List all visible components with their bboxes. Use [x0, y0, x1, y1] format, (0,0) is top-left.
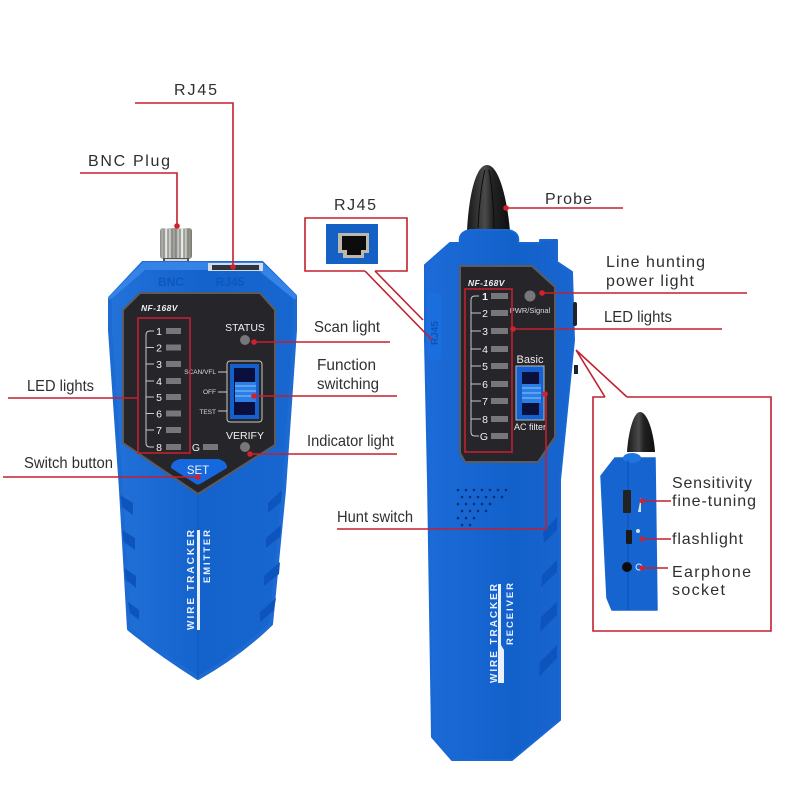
- SET button: SET: [187, 465, 209, 477]
- label: Probe: Probe: [545, 191, 592, 208]
- hunt switch: [514, 354, 546, 432]
- RJ45 side button: RJ45: [430, 321, 441, 345]
- callout: RJ45 inset: [305, 197, 432, 340]
- sensitivity label: [640, 475, 756, 510]
- LED list: 2: [482, 308, 488, 320]
- LED box: emitter: [138, 318, 190, 453]
- SET button: [171, 459, 227, 484]
- model name: NF-168V: [141, 303, 179, 313]
- LED list: 7: [482, 396, 488, 408]
- label: Scan light: [251, 319, 390, 345]
- flashlight label: [640, 531, 744, 548]
- sensitivity label: Sensitivity: [672, 475, 752, 492]
- LED list: 4: [482, 344, 488, 356]
- label: Line hunting power light: Line hunting: [606, 254, 705, 271]
- LED list: 8: [482, 414, 488, 426]
- speaker grille: [457, 489, 507, 526]
- label: Line hunting power light: power light: [606, 273, 695, 290]
- status indicator: STATUS: [225, 322, 265, 334]
- label: Line hunting power light: [539, 254, 747, 296]
- LED list: 8: [156, 442, 162, 454]
- side inset box: [593, 397, 771, 631]
- label: Scan light: Scan light: [314, 319, 381, 336]
- earphone label: socket: [672, 582, 726, 599]
- emitter print: [186, 529, 213, 630]
- emitter device: [108, 228, 297, 678]
- emitter device: RJ45: [216, 275, 245, 289]
- LED list: G: [192, 442, 200, 454]
- emitter print: WIRE TRACKER: [186, 529, 197, 630]
- LED list: [471, 291, 508, 443]
- earphone label: Earphone: [672, 564, 751, 581]
- probe tip: [467, 165, 510, 232]
- emitter panel: [123, 293, 275, 494]
- hunt switch: Basic: [517, 354, 544, 366]
- RJ45 inset pointer: [365, 271, 432, 340]
- receiver print: [489, 583, 516, 683]
- side view device: [601, 412, 657, 610]
- RJ45 side button: [427, 293, 441, 360]
- verify indicator: [226, 430, 264, 452]
- label: LED lights right: [510, 309, 722, 332]
- LED list: 5: [482, 361, 488, 373]
- label: Function switching: [251, 357, 397, 399]
- label: RJ45 top: RJ45: [174, 82, 217, 99]
- label: LED lights left: [8, 378, 138, 398]
- receiver body: [425, 230, 574, 760]
- LED list: 1: [156, 326, 162, 338]
- earphone label: [640, 564, 751, 599]
- label: Switch button: [3, 455, 201, 480]
- label: Indicator light: Indicator light: [307, 433, 394, 450]
- LED list: 4: [156, 376, 162, 388]
- RJ45 port: [208, 263, 263, 271]
- BNC connector: [160, 228, 192, 269]
- receiver panel: [460, 266, 555, 462]
- power indicator: [510, 290, 551, 315]
- LED list: G: [480, 431, 488, 443]
- flashlight label: flashlight: [672, 531, 744, 548]
- receiver print: RECEIVER: [505, 583, 516, 645]
- label: LED lights left: LED lights: [27, 378, 94, 395]
- label: Function switching: switching: [317, 376, 379, 393]
- RJ45 inset label: RJ45: [334, 197, 376, 214]
- emitter print: EMITTER: [202, 530, 213, 583]
- emitter body: [110, 263, 295, 678]
- function switch: SCAN/VFL: [184, 369, 216, 376]
- LED list: 7: [156, 425, 162, 437]
- receiver device: [425, 165, 578, 760]
- label: Function switching: Function: [317, 357, 376, 374]
- LED box: receiver: [465, 289, 512, 452]
- model name: NF-168V: [468, 278, 506, 288]
- receiver grip slots: [539, 517, 557, 677]
- label: BNC Plug: [80, 153, 180, 229]
- status indicator: [225, 322, 265, 345]
- LED list: 3: [482, 326, 488, 338]
- LED list: 6: [156, 408, 162, 420]
- function switch: [184, 361, 262, 422]
- callout: side view inset: [576, 350, 771, 631]
- RJ45 port photo: [326, 224, 378, 264]
- LED list: 2: [156, 342, 162, 354]
- LED list: 1: [482, 291, 488, 303]
- power indicator: PWR/Signal: [510, 306, 551, 315]
- sensitivity label: fine-tuning: [672, 493, 756, 510]
- label: RJ45 top: [135, 82, 236, 270]
- side inset pointer: [576, 350, 627, 397]
- label: Hunt switch: [337, 391, 548, 529]
- LED list: [146, 326, 218, 454]
- LED list: 5: [156, 392, 162, 404]
- receiver print: WIRE TRACKER: [489, 583, 500, 683]
- port labels: BNC: [158, 275, 184, 289]
- label: Switch button: Switch button: [24, 455, 113, 472]
- LED list: 6: [482, 379, 488, 391]
- label: LED lights right: LED lights: [604, 309, 672, 326]
- emitter grip slots: [120, 490, 282, 622]
- LED list: 3: [156, 359, 162, 371]
- label: Probe: [503, 191, 623, 211]
- RJ45 inset box: [305, 218, 407, 271]
- label: BNC Plug: BNC Plug: [88, 153, 170, 170]
- side controls: [573, 302, 578, 374]
- label: Indicator light: [247, 433, 397, 457]
- function switch: TEST: [199, 409, 216, 416]
- hunt switch: AC filter: [514, 422, 546, 432]
- label: Hunt switch: Hunt switch: [337, 509, 413, 526]
- verify indicator: VERIFY: [226, 430, 264, 442]
- function switch: OFF: [203, 389, 216, 396]
